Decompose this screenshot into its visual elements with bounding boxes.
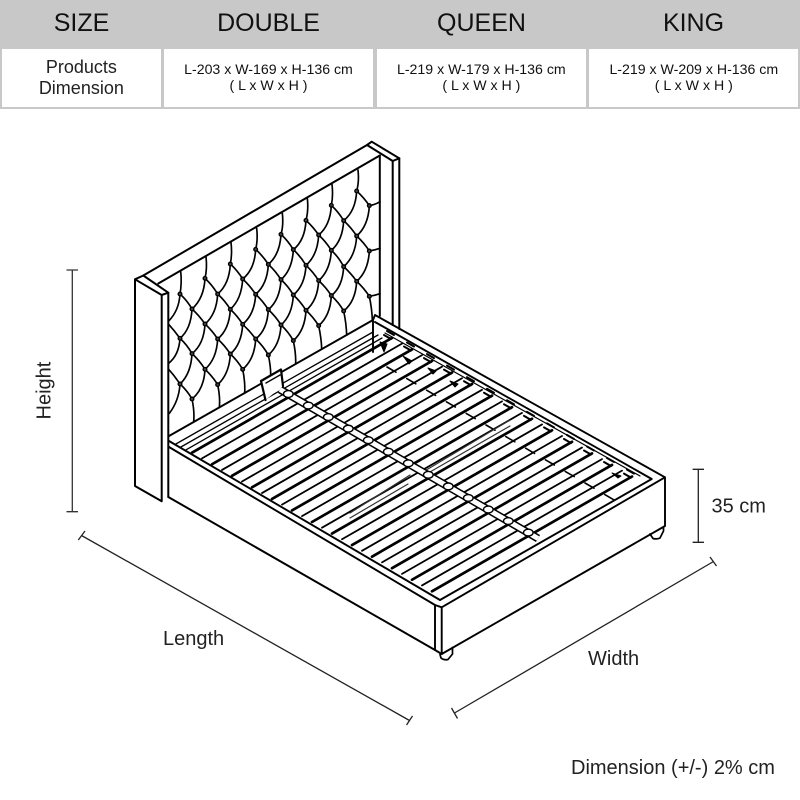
cell: queen dimensions: L-219 x W-179 x H-136 cm xyxy=(397,60,566,76)
cell: queen dimensions: ( L x W x H ) xyxy=(442,77,520,93)
cell: products dimension: Products xyxy=(46,57,117,77)
headboard frame xyxy=(135,142,435,650)
slats xyxy=(192,331,634,591)
width label: Width xyxy=(588,648,639,670)
height label: Height xyxy=(34,361,56,420)
width dimension line xyxy=(452,557,716,718)
bed base frame xyxy=(169,315,665,654)
bed feet xyxy=(440,527,664,660)
header: QUEEN: QUEEN xyxy=(437,9,526,37)
header: KING: KING xyxy=(663,9,724,37)
cell: king dimensions: L-219 x W-209 x H-136 cm xyxy=(609,60,778,76)
length dimension line xyxy=(78,531,413,725)
tufting buttons xyxy=(178,189,371,401)
lift handle strap xyxy=(261,370,283,400)
cell: king dimensions xyxy=(589,48,798,106)
35 cm dimension line xyxy=(693,469,704,542)
cell: king dimensions: ( L x W x H ) xyxy=(655,77,733,93)
height dimension line xyxy=(66,270,78,512)
cell: double dimensions: ( L x W x H ) xyxy=(229,77,308,93)
header: DOUBLE: DOUBLE xyxy=(217,9,320,37)
centre support strip xyxy=(280,390,538,538)
cell: queen dimensions xyxy=(377,48,586,106)
cell: products dimension: Dimension xyxy=(39,78,124,98)
35 cm label: 35 cm xyxy=(712,496,766,518)
tufted headboard panel xyxy=(169,170,380,422)
tolerance note: Dimension (+/-) 2% cm xyxy=(571,757,775,779)
size table xyxy=(0,0,800,108)
cell: products dimension xyxy=(2,48,161,106)
cell: double dimensions: L-203 x W-169 x H-136 cm xyxy=(184,60,353,76)
length label: Length xyxy=(163,628,224,650)
cell: double dimensions xyxy=(164,48,373,106)
bed illustration xyxy=(135,142,665,660)
header: SIZE: SIZE xyxy=(54,9,109,37)
